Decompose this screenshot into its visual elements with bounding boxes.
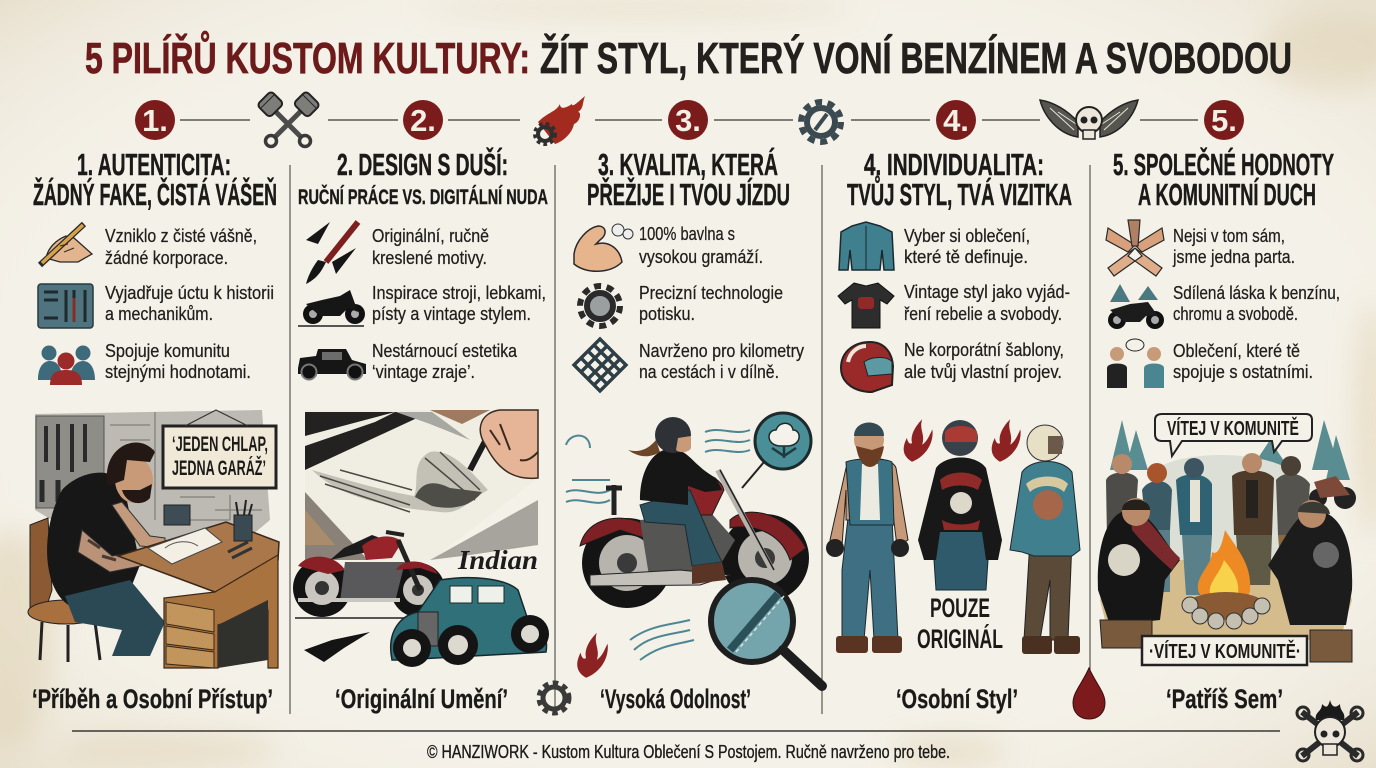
illustration: man drawing in garage xyxy=(28,410,279,668)
icon: skull and wrenches logo xyxy=(1297,700,1363,761)
footer rule xyxy=(72,730,1280,732)
heading 4: 4. INDIVIDUALITA: xyxy=(864,147,1044,182)
icon: blood drop xyxy=(1073,668,1105,719)
heading 2 xyxy=(298,146,548,209)
heading 1: ŽÁDNÝ FAKE, ČISTÁ VÁŠEŇ xyxy=(33,176,277,212)
text 1c: Spojuje komunitu xyxy=(105,341,230,361)
text 1c: stejnými hodnotami. xyxy=(105,362,251,382)
icon: gear xyxy=(580,286,620,326)
text 1a: žádné korporace. xyxy=(105,248,228,268)
icon: hand with pencil xyxy=(40,224,92,265)
text 1a xyxy=(105,226,257,268)
heading 3: PŘEŽIJE I TVOU JÍZDU xyxy=(587,176,790,212)
text 3b xyxy=(639,283,783,324)
text 2a: kreslené motivy. xyxy=(372,248,487,268)
seated biker left xyxy=(1098,498,1180,648)
number badge 2 xyxy=(403,100,443,140)
text 5a xyxy=(1172,226,1295,267)
caption 1: ‘Příběh a Osobní Přístup’ xyxy=(32,684,273,714)
sign text: JEDNA GARÁŽ’ xyxy=(172,456,266,480)
text 5b xyxy=(1173,283,1340,324)
biker with teal jacket xyxy=(1010,425,1080,654)
text 5a: Nejsi v tom sám, xyxy=(1173,226,1285,246)
text 2b xyxy=(372,283,546,324)
title xyxy=(85,29,1292,83)
text 2a: Originální, ručně xyxy=(372,226,489,246)
text 1b: Vyjadřuje úctu k historii xyxy=(105,283,274,303)
icon: toolbox tray xyxy=(38,284,93,328)
connector lines xyxy=(180,119,1198,121)
icon: crossed pistons xyxy=(257,91,320,146)
text 1b xyxy=(105,283,274,324)
text 4b: ření rebelie a svobody. xyxy=(904,304,1062,324)
icon: small gear xyxy=(539,683,569,713)
heading 5 xyxy=(1113,146,1334,212)
number badge 5: 5. xyxy=(1211,103,1237,138)
illustration: campfire community xyxy=(1098,414,1356,665)
text 4b xyxy=(904,282,1070,324)
POUZE ORIGINÁL label xyxy=(917,593,1003,654)
text 2c: Nestárnoucí estetika xyxy=(372,341,518,361)
text 5c: spojuje s ostatními. xyxy=(1173,362,1313,382)
icon: t-shirt xyxy=(838,283,894,328)
number badge 3 xyxy=(668,100,708,140)
text 2c: ‘vintage zraje’. xyxy=(372,362,475,382)
POUZE ORIGINÁL label: POUZE xyxy=(930,593,990,623)
text 4c xyxy=(904,340,1064,382)
heading 1 xyxy=(33,147,277,212)
caption 4: ‘Osobní Styl’ xyxy=(896,684,1018,714)
icon: hot rod xyxy=(298,349,366,380)
text 3a: 100% bavlna s xyxy=(639,224,735,244)
text 2b: Inspirace stroji, lebkami, xyxy=(372,283,546,303)
column 5: společné hodnoty xyxy=(1098,146,1356,714)
column dividers xyxy=(290,165,1090,714)
caption 3: ‘Vysoká Odolnost’ xyxy=(600,684,751,714)
Indian script: Indian xyxy=(457,545,538,575)
biker with denim vest xyxy=(826,422,909,653)
icon: helmet xyxy=(841,342,893,392)
text 3c: na cestách i v dílně. xyxy=(639,362,779,382)
heading 4: TVŮJ STYL, TVÁ VIZITKA xyxy=(847,174,1072,212)
text 1b: a mechanikům. xyxy=(105,304,213,324)
icon: arm and cotton xyxy=(574,224,633,271)
illustration: rider on motorcycle xyxy=(566,413,822,686)
number badge 4: 4. xyxy=(943,103,969,138)
text 2c xyxy=(372,341,518,382)
icon: woven mesh xyxy=(574,339,626,391)
text 3b: potisku. xyxy=(639,304,695,324)
icon: gear with wrench xyxy=(801,102,841,142)
text 5b: Sdílená láska k benzínu, xyxy=(1173,283,1340,303)
illustration: hand drawing, motorcycle and hot rod xyxy=(293,410,549,667)
campfire xyxy=(1182,530,1270,629)
icon: flaming gear xyxy=(535,96,585,144)
heading 3: 3. KVALITA, KTERÁ xyxy=(598,147,778,182)
title: 5 PILÍŘŮ KUSTOM KULTURY: xyxy=(85,29,530,83)
icon: joined hands xyxy=(1106,220,1164,276)
number badge 5 xyxy=(1204,100,1244,140)
column 4: individualita xyxy=(826,147,1105,719)
text 4a: které tě definuje. xyxy=(904,247,1028,267)
standing people xyxy=(1106,453,1310,600)
text 3c xyxy=(639,341,804,382)
number badge 4 xyxy=(936,100,976,140)
heading 1: 1. AUTENTICITA: xyxy=(77,147,231,182)
icon: two people talking xyxy=(1107,339,1164,388)
text 5c xyxy=(1173,341,1313,382)
column 1: autenticita xyxy=(28,147,279,714)
text 4c: Ne korporátní šablony, xyxy=(904,340,1064,360)
text 3c: Navrženo pro kilometry xyxy=(639,341,804,361)
column 2: design s duší xyxy=(293,146,549,714)
text 2b: písty a vintage stylem. xyxy=(372,304,531,324)
icon: denim jacket xyxy=(839,222,894,270)
icon: motorcycle xyxy=(298,290,365,326)
text 4a: Vyber si oblečení, xyxy=(904,226,1030,246)
speech bubble: VÍTEJ V KOMUNITĚ xyxy=(1167,416,1299,440)
biker with black back patch jacket xyxy=(918,420,1002,590)
speech bubble xyxy=(1155,414,1312,456)
text 4b: Vintage styl jako vyjád- xyxy=(904,282,1070,302)
icon: winged skull xyxy=(1040,100,1138,139)
number badge 3: 3. xyxy=(675,103,701,138)
POUZE ORIGINÁL label: ORIGINÁL xyxy=(917,623,1003,654)
sign text xyxy=(172,433,268,480)
illustration: three bikers xyxy=(826,419,1080,654)
footer text: © HANZIWORK - Kustom Kultura Oblečení S Postojem. Ručně navrženo pro tebe. xyxy=(427,742,950,762)
text 1a: Vzniklo z čisté vášně, xyxy=(105,226,257,246)
icon: red flame xyxy=(577,633,608,678)
banner: ·VÍTEJ V KOMUNITĚ· xyxy=(1149,639,1301,663)
heading 3 xyxy=(587,147,790,212)
caption 2: ‘Originální Umění’ xyxy=(335,684,508,714)
heading 2: RUČNÍ PRÁCE VS. DIGITÁLNÍ NUDA xyxy=(298,185,548,209)
text 2a xyxy=(372,226,489,268)
text 5c: Oblečení, které tě xyxy=(1173,341,1300,361)
text 4c: ale tvůj vlastní projev. xyxy=(904,362,1062,382)
icon: people xyxy=(38,346,95,385)
banner xyxy=(1142,636,1307,665)
seated biker right xyxy=(1268,500,1352,662)
number badge 2: 2. xyxy=(410,103,436,138)
number badge 1: 1. xyxy=(142,103,168,138)
text 4a xyxy=(904,226,1030,267)
text 3b: Precizní technologie xyxy=(639,283,783,303)
icon: flames xyxy=(904,419,1021,462)
icon: motorcycle with trees xyxy=(1108,284,1164,329)
text 3a xyxy=(639,224,763,267)
heading 4 xyxy=(847,147,1072,212)
caption 5: ‘Patříš Sem’ xyxy=(1166,684,1283,714)
text 5a: jsme jedna parta. xyxy=(1172,247,1295,267)
text 3a: vysokou gramáží. xyxy=(639,247,763,267)
heading 2: 2. DESIGN S DUŠÍ: xyxy=(337,146,508,182)
text 5b: chromu a svobodě. xyxy=(1173,304,1298,324)
sign text: ‘JEDEN CHLAP, xyxy=(172,433,268,456)
column 3: kvalita xyxy=(539,147,822,714)
icon: paint brush xyxy=(306,222,358,284)
number badge 1 xyxy=(135,100,175,140)
text 1c xyxy=(105,341,251,382)
